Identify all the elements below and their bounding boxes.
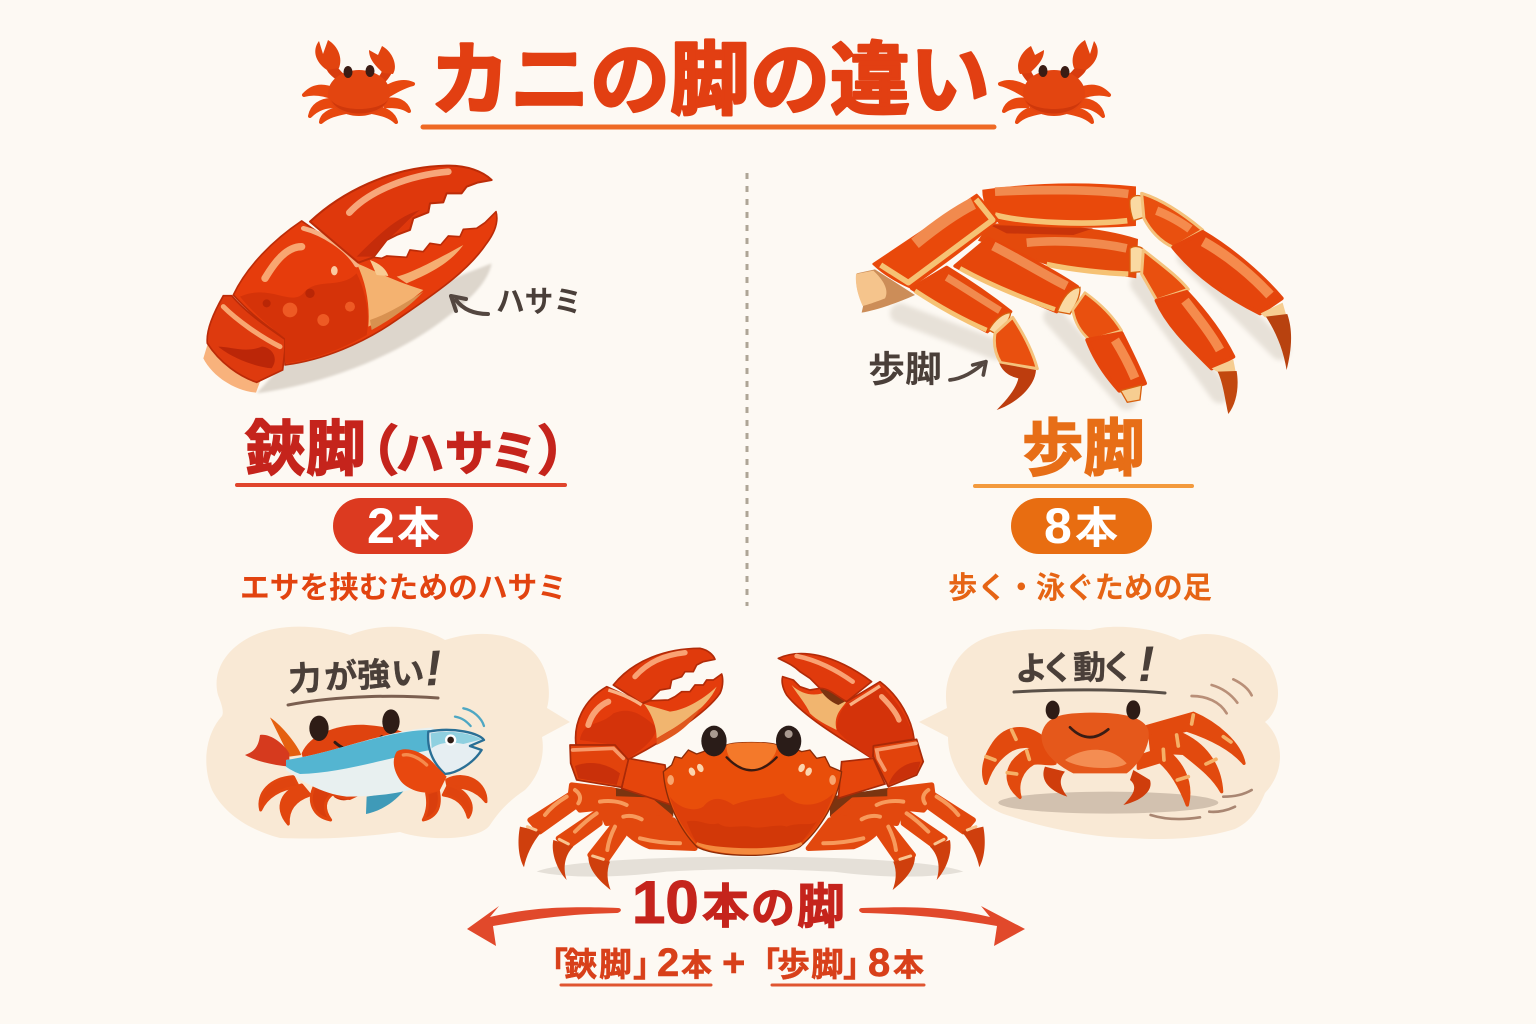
breakdown underline right: [772, 984, 924, 986]
breakdown text: 本: [681, 948, 712, 983]
speech bubble: active: [919, 627, 1280, 839]
heading underline: [237, 483, 565, 487]
description: pincer: エサを挟むためのハサミ: [240, 572, 567, 605]
speech bubble: strong: [206, 627, 570, 839]
breakdown text: 8: [868, 941, 890, 985]
heading: ten legs: 本: [702, 880, 749, 933]
title text: カニの脚の違い: [430, 36, 990, 125]
heading: ten legs: の: [751, 884, 795, 933]
right claw: [778, 654, 923, 798]
heading: ten legs: 10: [632, 869, 699, 936]
title underline: [423, 124, 994, 130]
badge: 2: 本: [397, 505, 440, 553]
left claw: [570, 648, 723, 805]
breakdown text: 「歩脚」: [747, 946, 876, 983]
heading: walking legs: 歩脚: [1022, 415, 1145, 484]
breakdown text: +: [722, 941, 745, 985]
bubble text: [1015, 636, 1155, 694]
label: hasami: ハサミ: [496, 286, 582, 319]
heading: pincer legs: ハサミ: [396, 428, 538, 481]
bubble underline: [288, 696, 438, 705]
bubble text: よく動く: [1015, 648, 1134, 687]
icon: small crab right: [1000, 40, 1109, 122]
breakdown text: 本: [893, 948, 924, 983]
heading underline: [975, 484, 1192, 488]
badge: 8: [1011, 498, 1152, 554]
bubble text: [287, 640, 443, 704]
breakdown underline left: [561, 984, 711, 986]
badge: 8: 8: [1044, 498, 1072, 554]
label: walking legs: 歩脚: [868, 350, 942, 390]
panel: walking legs: [856, 184, 1291, 605]
heading: pincer legs: ）: [537, 422, 591, 482]
description: walking: 歩く・泳ぐための足: [948, 572, 1212, 605]
bubble shape: [206, 627, 570, 839]
icon: small crab left: [304, 40, 413, 122]
badge: 8: 本: [1075, 505, 1118, 553]
bubble underline: [1014, 690, 1165, 693]
crab body: [663, 726, 842, 855]
illustration: crab holding fish: [245, 708, 486, 824]
breakdown text: 2: [657, 941, 679, 985]
heading: ten legs: 脚: [797, 881, 845, 934]
total legs group: [467, 869, 1025, 985]
arrow: right: [859, 906, 1025, 946]
walking legs left: [519, 785, 695, 890]
illustration: walking crab: [984, 679, 1252, 819]
walking legs right: [808, 785, 985, 890]
heading: pincer legs: （: [345, 422, 399, 482]
panel divider: [746, 173, 748, 606]
breakdown text: 「鋏脚」: [535, 946, 666, 983]
title group: [304, 36, 1109, 127]
crab shadow: [537, 857, 963, 877]
heading: pincer legs: 鋏脚: [245, 416, 366, 483]
bubble text: !: [1138, 636, 1155, 692]
illustration: walking legs: [856, 184, 1291, 414]
illustration: central crab: [519, 648, 985, 890]
arrow: walking legs: [950, 362, 986, 380]
bubble text: 力が強い: [287, 654, 425, 698]
bubble shape: [919, 627, 1280, 839]
badge: 2: 2: [367, 498, 395, 554]
badge: 2: [333, 498, 473, 554]
panel: pincer legs: [203, 166, 591, 605]
arrow: left: [467, 906, 621, 946]
illustration: claw: [203, 166, 497, 393]
bubble text: !: [424, 640, 443, 697]
arrow: hasami: [451, 296, 488, 314]
